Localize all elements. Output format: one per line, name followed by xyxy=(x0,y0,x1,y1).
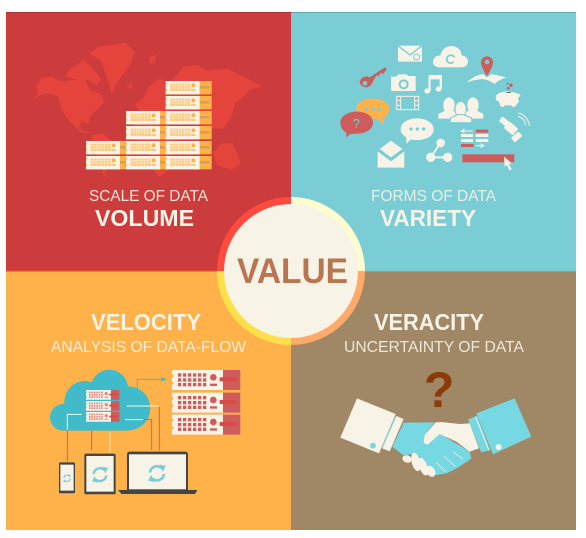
cloud data-flow diagram xyxy=(50,370,240,494)
world map xyxy=(32,43,262,178)
panel: veracity xyxy=(291,270,576,530)
subtitle: analysis of data-flow: ANALYSIS OF DATA-FLOW xyxy=(51,339,247,356)
icon: search bar with cursor xyxy=(462,154,514,170)
icon: email at xyxy=(398,46,422,62)
icon: chat bubbles: ? xyxy=(353,117,360,131)
icon: map pin xyxy=(466,56,506,84)
right sleeve xyxy=(468,398,531,454)
arrow: cloud to server xyxy=(137,377,167,388)
icon: speech bubble xyxy=(401,118,434,144)
icon: film strip xyxy=(397,96,419,110)
clasped hands xyxy=(392,422,479,479)
subtitle: uncertainty of data: UNCERTAINTY OF DATA xyxy=(344,339,524,356)
panel: volume xyxy=(6,12,291,271)
server stack xyxy=(86,81,212,169)
large servers xyxy=(172,370,240,435)
panel: velocity xyxy=(6,270,291,530)
icon: phone xyxy=(59,462,75,493)
icon: tablet xyxy=(84,454,116,494)
icon: share xyxy=(427,140,451,161)
heading: variety: VARIETY xyxy=(380,205,476,231)
icon: key xyxy=(360,67,387,87)
icon: camera xyxy=(391,74,416,91)
handshake xyxy=(340,398,531,479)
heading: volume: VOLUME xyxy=(95,205,194,231)
icon: chat bubbles xyxy=(340,99,389,137)
subtitle: scale of data: SCALE OF DATA xyxy=(89,188,208,205)
value circle xyxy=(217,197,365,345)
icon: music note xyxy=(424,75,442,94)
panel: variety xyxy=(291,12,576,271)
icon: wifi device xyxy=(499,113,530,142)
icon: piggy bank xyxy=(496,83,521,107)
icon: transfer list xyxy=(461,129,488,148)
data type icons xyxy=(340,46,530,170)
cloud xyxy=(50,370,150,431)
left sleeve xyxy=(340,398,404,453)
heading: veracity: VERACITY xyxy=(374,309,484,335)
subtitle: forms of data: FORMS OF DATA xyxy=(371,188,496,205)
icon: envelope xyxy=(378,141,404,168)
heading: velocity: VELOCITY xyxy=(91,309,201,335)
flow arrows xyxy=(67,406,159,462)
cloud servers xyxy=(86,390,119,422)
icon: people xyxy=(438,97,483,123)
icon: cloud xyxy=(433,46,468,67)
question mark: ? xyxy=(424,362,454,418)
value label: VALUE xyxy=(237,252,348,291)
icon: laptop xyxy=(118,452,197,494)
